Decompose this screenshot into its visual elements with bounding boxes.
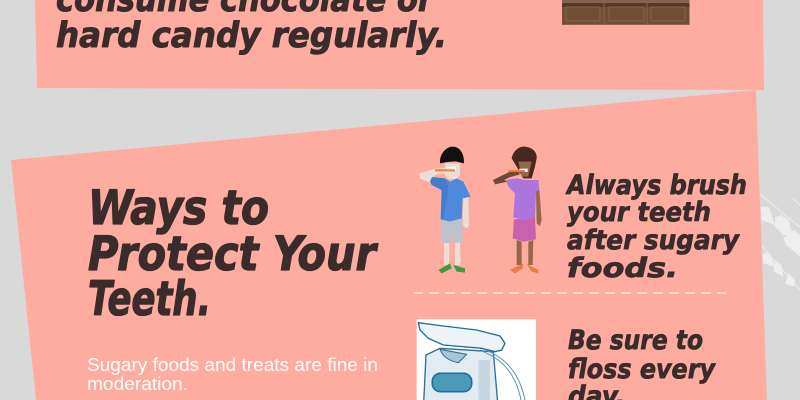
heading: ways to protect your teeth: Teeth. (88, 272, 211, 327)
icon: dental floss (417, 319, 536, 400)
text: top panel heading (56, 0, 447, 56)
text: always brush: after sugary (567, 225, 740, 256)
divider (413, 292, 726, 294)
heading: ways to protect your teeth (88, 181, 378, 327)
heading: ways to protect your teeth: Ways to (88, 181, 269, 236)
text: moderation note: Sugary foods and treats are fine in (87, 355, 378, 375)
icon: wheat decoration (760, 194, 800, 290)
heading: ways to protect your teeth: Protect Your (88, 227, 378, 282)
icon: boy brushing teeth (419, 147, 471, 273)
text: always brush: foods. (567, 253, 678, 284)
text: moderation note: moderation. (87, 374, 188, 394)
text: floss every day (568, 325, 716, 400)
text: floss every day: floss every (568, 354, 716, 385)
panel: ways to protect (11, 90, 767, 400)
icon: chocolate bar (562, 0, 690, 25)
text: always brush: your teeth (567, 197, 711, 228)
text: floss every day: Be sure to (568, 325, 703, 356)
text: always brush: Always brush (565, 170, 747, 201)
text: always brush (565, 170, 747, 284)
icon: girl brushing teeth (493, 147, 542, 273)
text: top panel heading: hard candy regularly. (56, 16, 447, 56)
text: moderation note (87, 355, 378, 394)
panel: top (35, 0, 764, 90)
